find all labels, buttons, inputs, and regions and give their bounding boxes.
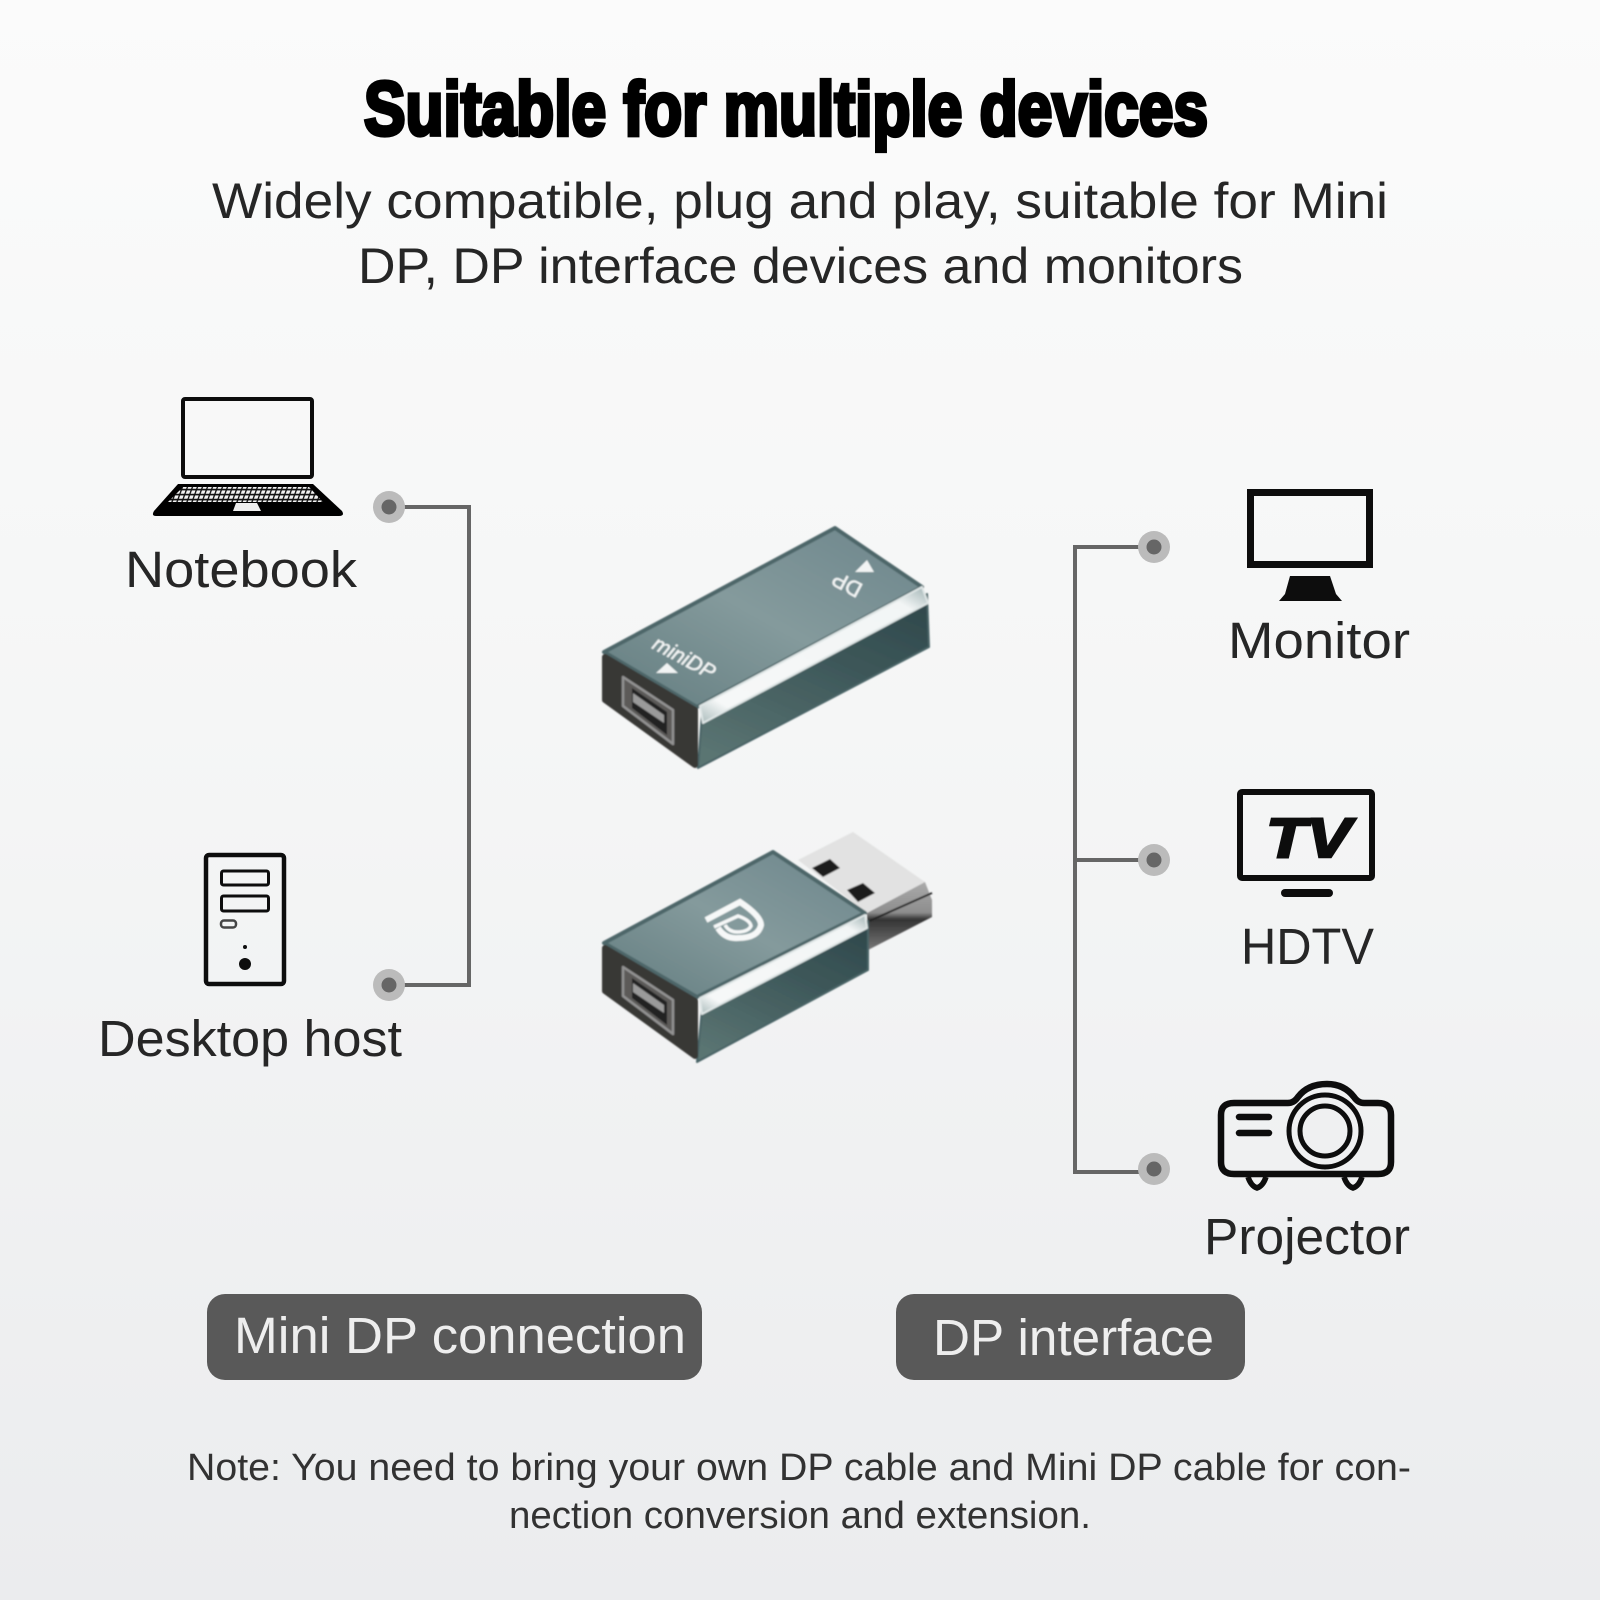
adapter top face: [604, 852, 865, 997]
adapter top face: [604, 528, 922, 707]
adapter: DP plug: [604, 832, 932, 1062]
icon: notebook: [153, 399, 343, 516]
adapter arrow: DP: [855, 560, 874, 572]
plug holes: [812, 859, 875, 902]
label: notebook: Notebook: [125, 541, 358, 598]
subtitle: Widely compatible, plug and play, suitable for Mini: [212, 173, 1388, 229]
icon: HDTV: [1240, 792, 1372, 893]
icon: projector: [1221, 1084, 1391, 1188]
note: [187, 1447, 1411, 1537]
plug top: [798, 832, 925, 913]
icon: monitor: [1250, 492, 1370, 601]
label: projector: Projector: [1204, 1208, 1410, 1265]
adapter label: DP: DP: [828, 566, 866, 603]
label: desktop host: Desktop host: [98, 1010, 402, 1067]
subtitle: [212, 173, 1388, 294]
plug side: [867, 882, 932, 950]
title block: [212, 67, 1388, 294]
button: DP interface: [896, 1294, 1245, 1380]
icon: DisplayPort logo: [706, 902, 761, 938]
note: nection conversion and extension.: [509, 1495, 1091, 1537]
adapter side face: [697, 921, 868, 1062]
adapter highlight strip: [700, 587, 928, 723]
adapter front face: [605, 657, 695, 765]
adapter highlight strip: [700, 915, 867, 1014]
adapter label: miniDP: miniDP: [649, 632, 719, 684]
note: Note: You need to bring your own DP cable and Mini DP cable for con-: [187, 1447, 1411, 1489]
button: Mini DP connection: [207, 1294, 702, 1380]
icon: HDTV: TV: [1266, 806, 1357, 869]
button: Mini DP connection: Mini DP connection: [234, 1307, 686, 1364]
label: HDTV: HDTV: [1241, 918, 1374, 975]
connector lines: left: [373, 491, 469, 1001]
connector lines: right: [1075, 531, 1170, 1185]
adapter front face: [605, 948, 695, 1056]
heading: Suitable for multiple devices: [364, 67, 1208, 152]
subtitle: DP, DP interface devices and monitors: [358, 238, 1243, 294]
adapter side face: [698, 594, 929, 768]
adapter port: [623, 967, 673, 1034]
adapter: miniDP to DP: [604, 528, 929, 768]
button: DP interface: DP interface: [933, 1309, 1214, 1366]
icon: desktop host: [206, 855, 284, 984]
label: monitor: Monitor: [1228, 612, 1410, 669]
adapter arrow: miniDP: [656, 663, 678, 673]
adapter port: [623, 677, 673, 744]
